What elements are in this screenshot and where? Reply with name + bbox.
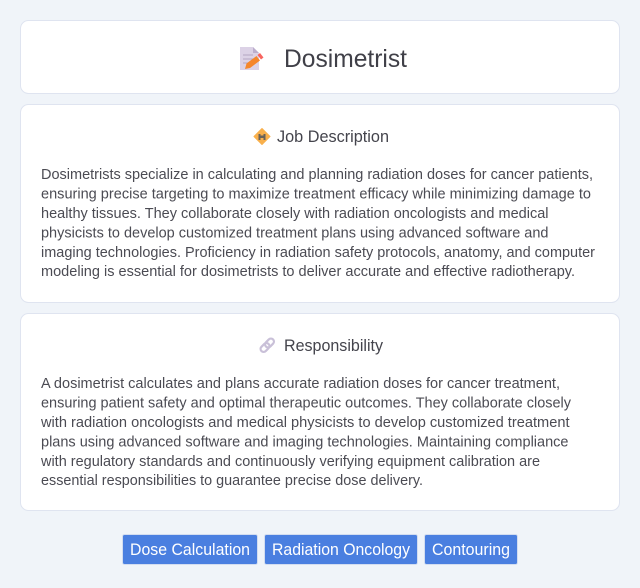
text block: responsibility: A dosimetrist calculates and plans accurate radiation doses for cancer treatment, [41, 376, 560, 392]
panel: responsibility [20, 314, 620, 510]
panel: job description [20, 104, 620, 302]
text block: job description: Dosimetrists specialize in calculating and planning radiation doses for cancer patients, [41, 167, 593, 183]
icon: document with pencil [240, 47, 264, 70]
text block: responsibility: with regulatory standards and continuously verifying equipment calibration are [40, 454, 540, 470]
tag: Contouring [424, 534, 518, 564]
text block: job description: healthy tissues. They collaborate closely with radiation oncologists and medical [41, 206, 548, 222]
text block: responsibility: with radiation oncologists and medical physicists to develop customized treatment [40, 415, 569, 431]
text block: responsibility: essential responsibilities to guarantee precise dose delivery. [41, 473, 423, 489]
panel: title [20, 20, 620, 94]
heading: Job Description: Job Description [277, 128, 389, 146]
icon: diamond sign [254, 128, 270, 144]
text block: job description: physicists to develop customized treatment plans using advanced software and [41, 226, 548, 242]
heading: Dosimetrist: Dosimetrist [284, 45, 407, 73]
icon: chain link [259, 337, 275, 353]
tag: Contouring: Contouring [432, 540, 510, 559]
text block: responsibility [40, 376, 572, 489]
text block: job description: modeling is essential for dosimetrists to deliver accurate and effective radiotherapy. [41, 264, 575, 280]
text block: responsibility: ensuring patient safety and optimal therapeutic outcomes. They collaborate closely [41, 396, 572, 412]
text block: job description: imaging technologies. Proficiency in radiation safety protocols, anatomy, and computer [41, 245, 595, 261]
heading: Responsibility: Responsibility [284, 337, 384, 355]
text block: job description: ensuring precise targeting to maximize treatment efficacy while minimizing damage to [41, 186, 591, 202]
tag: Dose Calculation [122, 534, 258, 564]
text block: responsibility: plans using advanced software and imaging technologies. Maintaining compliance [41, 434, 568, 450]
tag: Radiation Oncology: Radiation Oncology [272, 540, 410, 559]
tag: Dose Calculation: Dose Calculation [130, 540, 250, 559]
text block: job description [41, 167, 595, 280]
tag: Radiation Oncology [264, 534, 418, 564]
